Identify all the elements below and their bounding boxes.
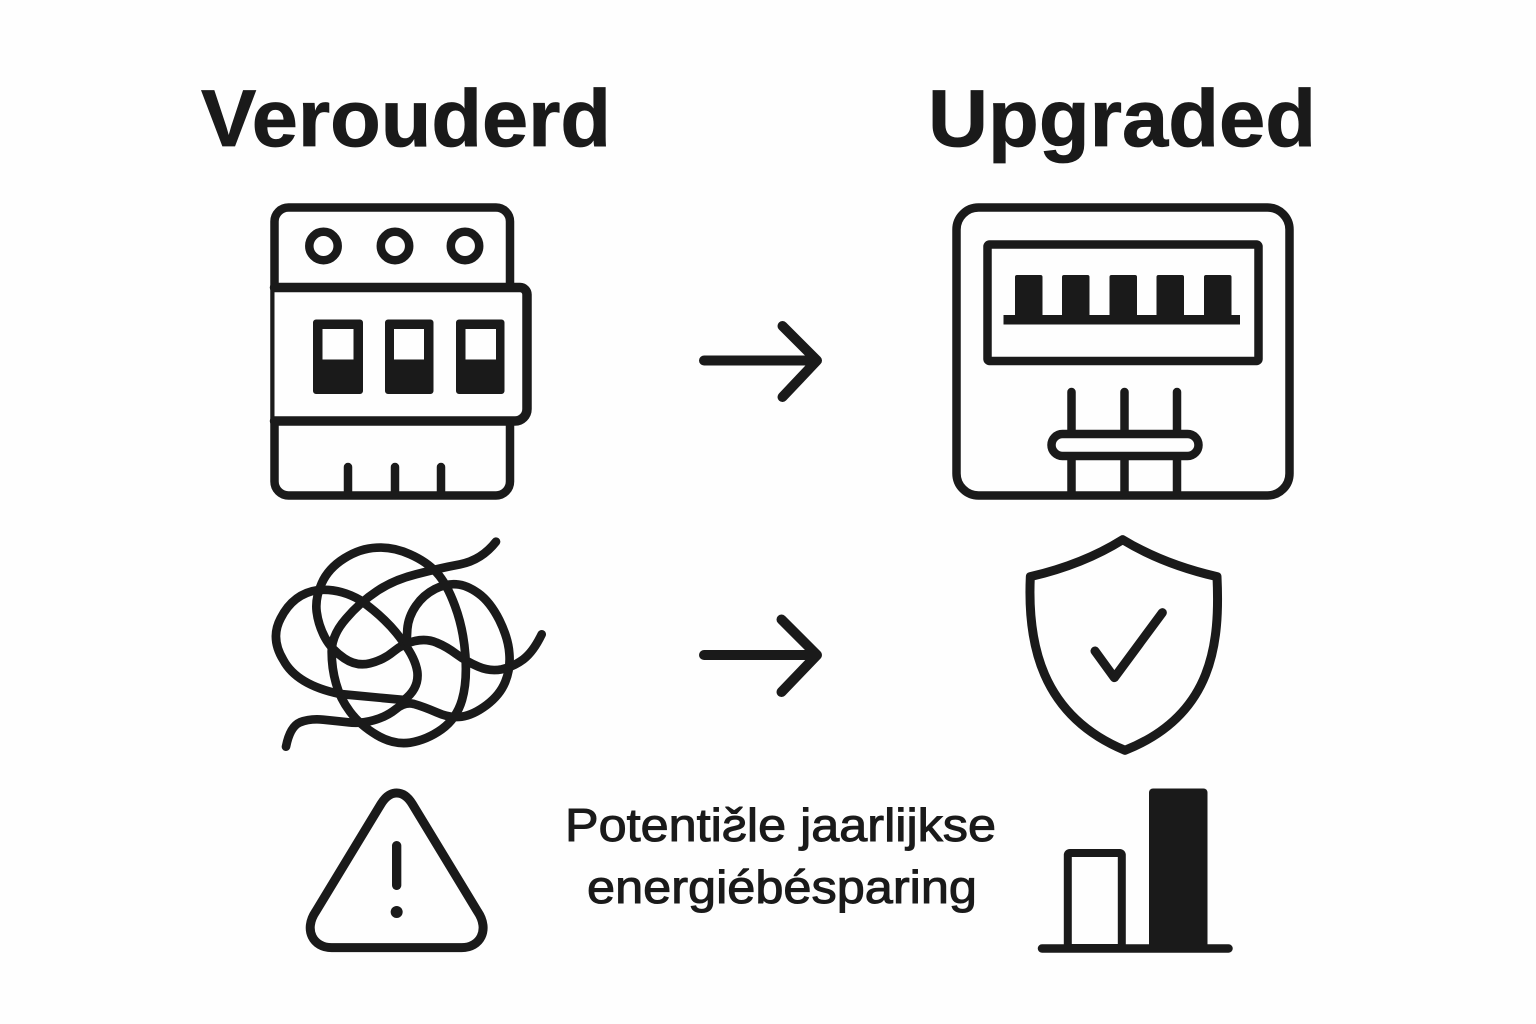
icon: upgraded distribution panel xyxy=(956,208,1290,496)
icon: old circuit breaker xyxy=(274,208,527,496)
icon: shield with check mark xyxy=(1030,540,1218,750)
arrow: top xyxy=(704,326,817,397)
icon: warning triangle xyxy=(310,793,483,948)
heading: Verouderd: Verouderd xyxy=(201,74,611,164)
icon: savings bar chart xyxy=(1042,788,1228,948)
text: potential annual energy saving: energiébésparing xyxy=(587,861,977,913)
heading: Upgraded: Upgraded xyxy=(928,74,1316,164)
text: potential annual energy saving: Potentiƨ̌le jaarlijkse xyxy=(565,799,996,851)
text: potential annual energy saving xyxy=(565,799,996,913)
arrow: middle xyxy=(704,620,817,692)
icon: tangled wires xyxy=(276,542,542,747)
